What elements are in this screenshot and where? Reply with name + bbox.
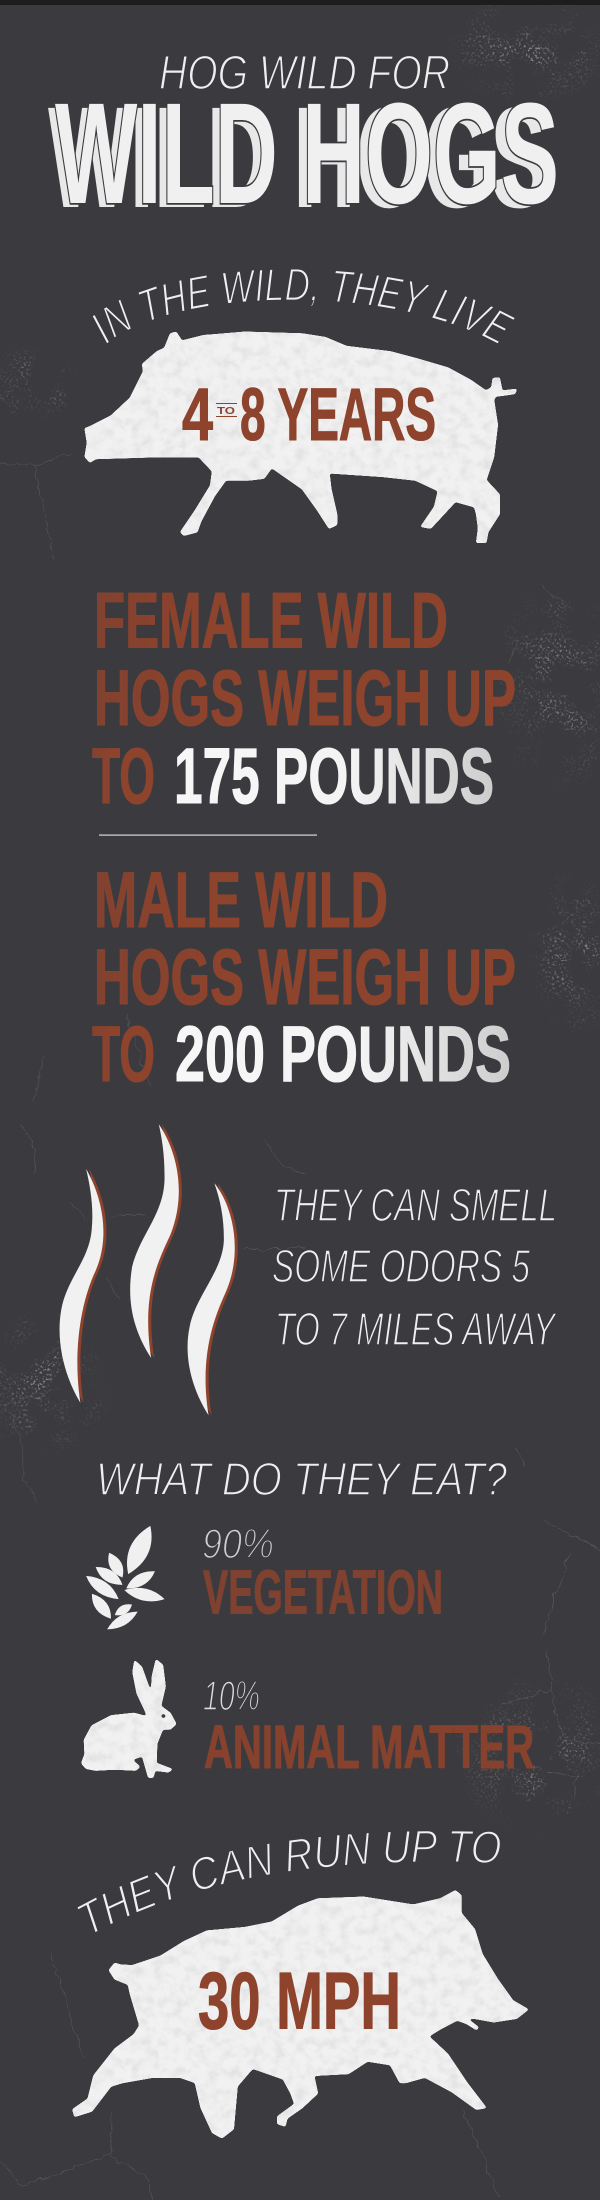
vegetation stat: VEGETATION [203,1558,443,1628]
vegetation stat [202,1520,443,1628]
animal matter stat [203,1672,534,1781]
title: wild hogs [48,73,559,238]
walking hog with lifespan [85,332,517,543]
arc text: in the wild, they live: IN THE WILD, THEY LIVE [92,270,515,344]
icon: leaves [82,1522,166,1634]
lifespan value [182,373,436,456]
female weight statement: TO [92,731,155,820]
smell text [272,1179,557,1355]
lifespan value: 8 YEARS [240,373,436,456]
title: hog wild for: HOG WILD FOR [159,47,450,100]
vegetation stat: 90% [202,1520,274,1567]
animal matter stat: 10% [203,1672,260,1719]
male weight statement: MALE WILD [94,855,388,944]
running hog with speed [73,1891,528,2138]
icon: scent wisps [60,1124,238,1415]
male weight statement [92,855,516,1098]
speed value: 30 MPH [198,1956,401,2046]
female weight statement [92,576,516,820]
icon: walking hog silhouette [85,332,517,543]
icon: rabbit [82,1660,176,1777]
male weight statement: TO [92,1009,155,1098]
arc text: they can run up to: THEY CAN RUN UP TO [78,1831,500,1932]
heading: what do they eat: WHAT DO THEY EAT? [96,1453,507,1505]
icon: running hog silhouette [73,1891,528,2138]
lifespan value: 4 [182,373,213,456]
lifespan value: TO [217,406,235,417]
divider [99,834,317,836]
